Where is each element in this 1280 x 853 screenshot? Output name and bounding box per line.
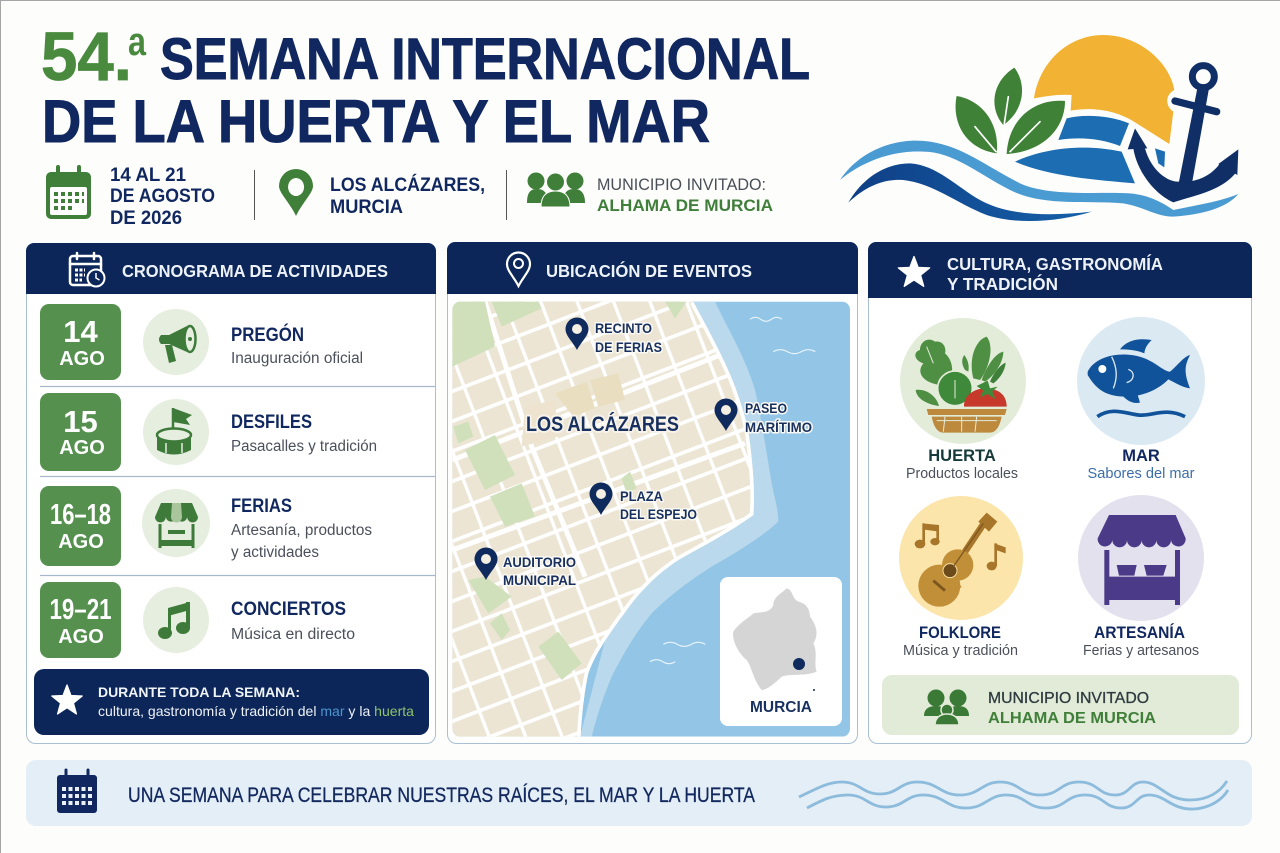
edition number: a [128, 20, 147, 64]
event text: Inauguración oficial [231, 350, 363, 367]
artesanía label: Ferias y artesanos [1083, 643, 1199, 659]
event text: Música en directo [231, 626, 355, 643]
inset map: murcia: MURCIA [750, 699, 812, 716]
pin: plaza del espejo: DEL ESPEJO [620, 506, 697, 522]
panel: cultura, gastronomía y tradición [868, 242, 1252, 744]
callout: municipio invitado [882, 675, 1239, 735]
artesanía label [1083, 623, 1199, 659]
dark wave [848, 163, 1092, 221]
date badge 16-18 ago: AGO [58, 531, 104, 553]
row: conciertos [40, 582, 355, 658]
event text: Artesanía, productos [231, 522, 372, 539]
callout: municipio invitado: MUNICIPIO INVITADO [988, 690, 1149, 707]
date badge 19-21 ago: AGO [58, 626, 104, 648]
event text: DESFILES [231, 412, 312, 433]
icon: music note [143, 587, 209, 653]
pin: recinto de ferias: RECINTO [595, 320, 652, 336]
event text: PREGÓN [231, 324, 304, 346]
item: folklore [899, 496, 1023, 659]
pin: auditorio municipal: AUDITORIO [503, 554, 576, 570]
pin: paseo marítimo [714, 399, 812, 435]
header: ubicación [447, 242, 858, 294]
edition number: 54. [41, 18, 132, 95]
mar label: Sabores del mar [1088, 466, 1195, 482]
folklore label: FOLKLORE [919, 624, 1001, 642]
icon: drum and flag [143, 399, 209, 465]
location text [330, 173, 485, 218]
icon: market stall [142, 489, 210, 557]
date badge 16-18 ago [40, 486, 121, 566]
pin: recinto de ferias: DE FERIAS [595, 339, 662, 355]
guest municipality text [597, 175, 773, 215]
header: cultura: Y TRADICIÓN [947, 273, 1058, 294]
dates text: DE 2026 [110, 207, 182, 229]
logo: sun, leaves, waves and anchor [840, 35, 1238, 221]
sea bands [1015, 116, 1165, 183]
guest municipality text: MUNICIPIO INVITADO: [597, 175, 766, 194]
panel: ubicación de eventos [445, 242, 858, 757]
date badge 19-21 ago: 19–21 [50, 594, 112, 626]
callout: durante toda la semana: DURANTE TODA LA SEMANA: [98, 684, 300, 700]
date badge 14 ago: 14 [63, 314, 98, 349]
icon: calendar [46, 167, 91, 219]
footer slogan: UNA SEMANA PARA CELEBRAR NUESTRAS RAÍCES, EL MAR Y LA HUERTA [128, 784, 755, 807]
folklore label: Música y tradición [903, 643, 1018, 659]
event text: CONCIERTOS [231, 599, 346, 620]
row: pregón [40, 304, 363, 380]
dates text: DE AGOSTO [110, 185, 215, 207]
header: cultura: CULTURA, GASTRONOMÍA [947, 253, 1163, 274]
title line one: SEMANA INTERNACIONAL [160, 27, 810, 92]
date badge 15 ago [40, 393, 121, 471]
header: cronograma [26, 243, 436, 294]
date badge 16-18 ago: 16–18 [50, 499, 111, 531]
pin: recinto de ferias [566, 318, 662, 355]
item: mar [1077, 317, 1205, 482]
icon: megaphone [143, 309, 209, 375]
icon: location pin [279, 169, 313, 216]
event text [231, 324, 363, 367]
icon: people [527, 172, 585, 207]
map label: los alcázares: LOS ALCÁZARES [526, 413, 679, 436]
mar label: MAR [1122, 447, 1160, 465]
waves decoration [799, 781, 1228, 809]
date badge 14 ago [40, 304, 121, 380]
location text: MURCIA [330, 196, 403, 218]
callout: durante toda la semana [34, 669, 429, 735]
huerta label: Productos locales [906, 466, 1018, 482]
event text: Pasacalles y tradición [231, 438, 377, 455]
huerta label [906, 447, 1018, 482]
date badge 14 ago: AGO [59, 348, 105, 370]
item: artesanía [1078, 495, 1204, 659]
header: cultura [868, 242, 1252, 298]
pin: plaza del espejo [590, 483, 697, 522]
pin: paseo marítimo: MARÍTIMO [745, 419, 812, 435]
artesanía label: ARTESANÍA [1094, 623, 1185, 642]
dates text [110, 164, 215, 229]
map artwork [445, 290, 850, 757]
pin: paseo marítimo: PASEO [745, 400, 787, 416]
header: ubicación: UBICACIÓN DE EVENTOS [546, 260, 752, 281]
location text: LOS ALCÁZARES, [330, 173, 485, 196]
panel: cronograma de actividades [26, 243, 436, 744]
callout: municipio invitado: ALHAMA DE MURCIA [988, 710, 1156, 727]
mar label [1088, 447, 1195, 482]
guest municipality text: ALHAMA DE MURCIA [597, 196, 773, 215]
icon: footer calendar [57, 770, 97, 813]
date badge 15 ago: AGO [59, 437, 105, 459]
inset map: murcia [720, 577, 842, 726]
pin: auditorio municipal [474, 548, 576, 588]
item: huerta [900, 318, 1026, 482]
info row [46, 164, 773, 229]
leaves [956, 68, 1065, 158]
pin: auditorio municipal: MUNICIPAL [503, 572, 576, 588]
event text [231, 496, 372, 561]
huerta label: HUERTA [928, 447, 996, 465]
anchor [1128, 66, 1238, 202]
event text: y actividades [231, 544, 319, 561]
folklore label [903, 624, 1018, 659]
event text [231, 412, 377, 455]
date badge 15 ago: 15 [63, 404, 98, 439]
icon: vegetable basket [900, 318, 1026, 444]
date badge 19-21 ago [40, 582, 121, 658]
pin: plaza del espejo: PLAZA [620, 488, 663, 504]
icon: purple market stall [1078, 495, 1204, 621]
icon: fish [1077, 317, 1205, 445]
row: ferias [40, 486, 372, 566]
title [41, 18, 810, 155]
callout: durante toda la semana: cultura, gastronomía y tradición del mar y la huerta [98, 703, 414, 719]
row: desfiles [40, 393, 377, 471]
title line two: DE LA HUERTA Y EL MAR [42, 88, 710, 155]
footer banner [26, 760, 1252, 826]
icon: guitar and notes [899, 496, 1023, 620]
dates text: 14 AL 21 [110, 164, 186, 186]
header: cronograma: CRONOGRAMA DE ACTIVIDADES [122, 261, 388, 281]
light wave [840, 141, 1238, 217]
map [445, 290, 850, 757]
sun [1034, 35, 1174, 144]
event text: FERIAS [231, 496, 292, 517]
event text [231, 599, 355, 643]
